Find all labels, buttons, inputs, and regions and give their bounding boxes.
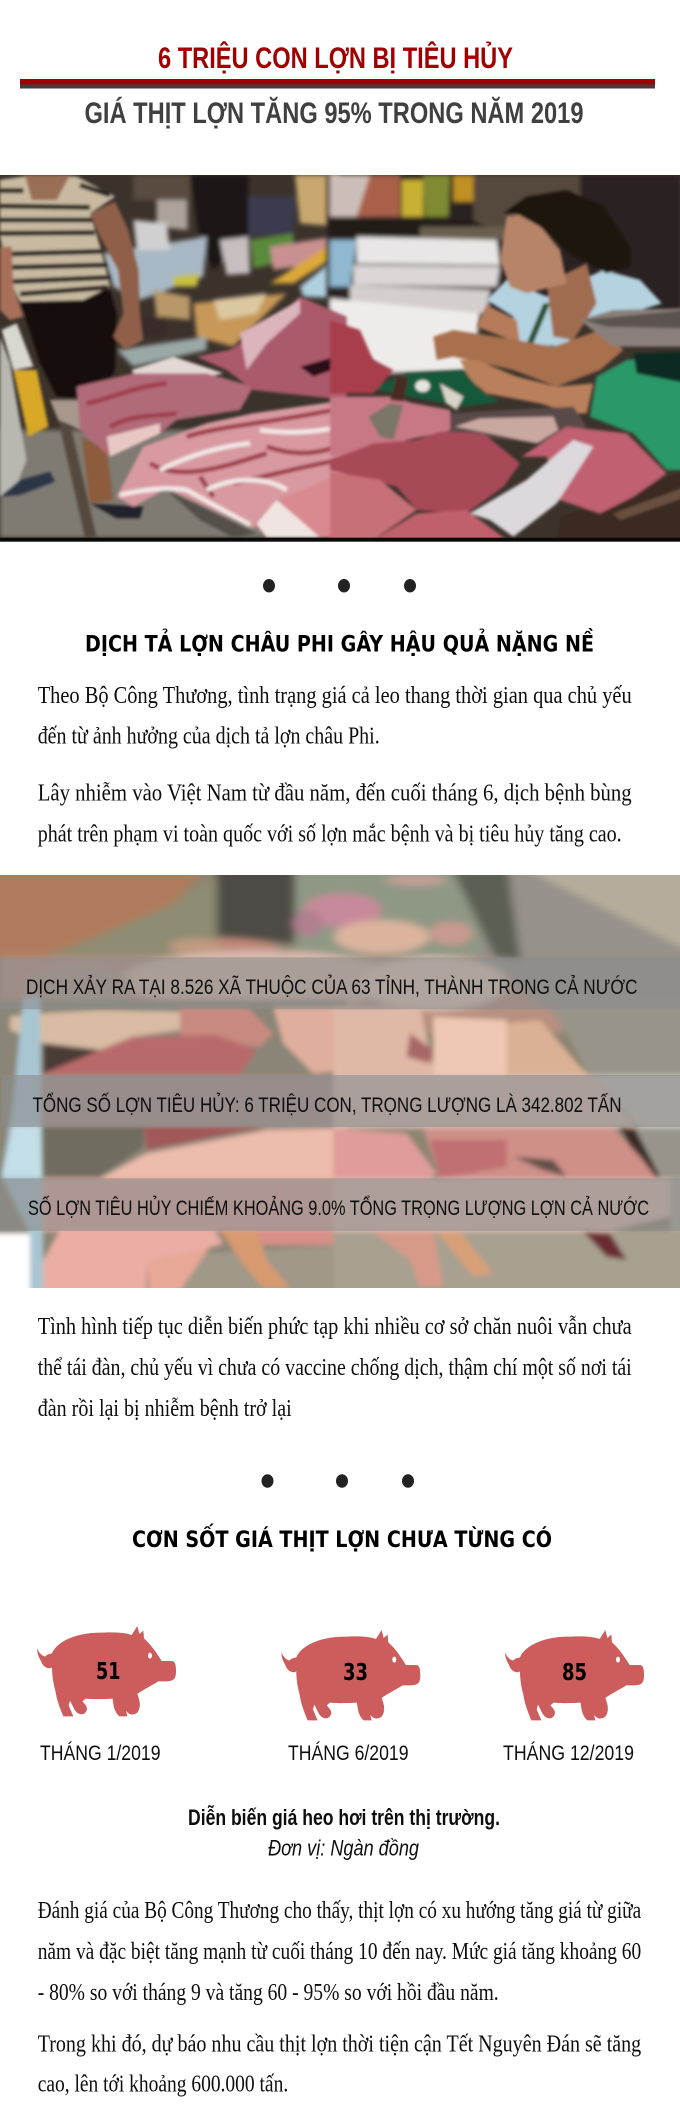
title: 6 TRIỆU CON LỢN BỊ TIÊU HỦY <box>158 41 513 75</box>
band: outbreak scope <box>0 957 680 1009</box>
month label: January: THÁNG 1/2019 <box>40 1740 160 1765</box>
photo: pork stall at market <box>0 160 680 553</box>
paragraph 5: cao, lên tới khoảng 600.000 tấn. <box>38 2072 288 2098</box>
heading: section 2: CƠN SỐT GIÁ THỊT LỢN CHƯA TỪNG CÓ <box>132 1524 552 1553</box>
pig icon: June 2019 price <box>282 1630 420 1720</box>
caption: unit: Đơn vị: Ngàn đồng <box>268 1836 420 1861</box>
heading: section 1: DỊCH TẢ LỢN CHÂU PHI GÂY HẬU QUẢ NẶNG NỀ <box>85 629 594 658</box>
pig icon: January 2019 price <box>37 1626 176 1716</box>
pig icon: January 2019 price: 51 <box>96 1659 120 1685</box>
paragraph 4: - 80% so với tháng 9 và tăng 60 - 95% so với hồi đầu năm. <box>38 1980 499 2006</box>
paragraph 1 <box>38 683 632 750</box>
dots divider 2 <box>262 1474 414 1488</box>
pig icon: June 2019 price: 33 <box>343 1660 368 1686</box>
paragraph 2 <box>38 781 632 848</box>
paragraph 1: đến từ ảnh hưởng của dịch tả lợn châu Phi. <box>38 724 380 750</box>
paragraph 4 <box>38 1898 641 2006</box>
dots divider 1 <box>263 579 416 592</box>
paragraph 3 <box>38 1314 632 1422</box>
paragraph 5 <box>38 2032 641 2098</box>
photo: culled pigs <box>0 860 680 1300</box>
month label: June: THÁNG 6/2019 <box>288 1740 408 1765</box>
black bar under photo <box>0 538 680 542</box>
month label: December: THÁNG 12/2019 <box>503 1740 634 1765</box>
title rule <box>20 79 655 88</box>
caption: live hog price: Diễn biến giá heo hơi trên thị trường. <box>188 1805 500 1830</box>
pig icon: December 2019 price <box>505 1630 644 1720</box>
pig icon: December 2019 price: 85 <box>562 1660 587 1686</box>
band: share of national weight <box>0 1178 680 1231</box>
paragraph 3: đàn rồi lại bị nhiễm bệnh trở lại <box>38 1396 292 1422</box>
band: total culled <box>2 1075 680 1127</box>
